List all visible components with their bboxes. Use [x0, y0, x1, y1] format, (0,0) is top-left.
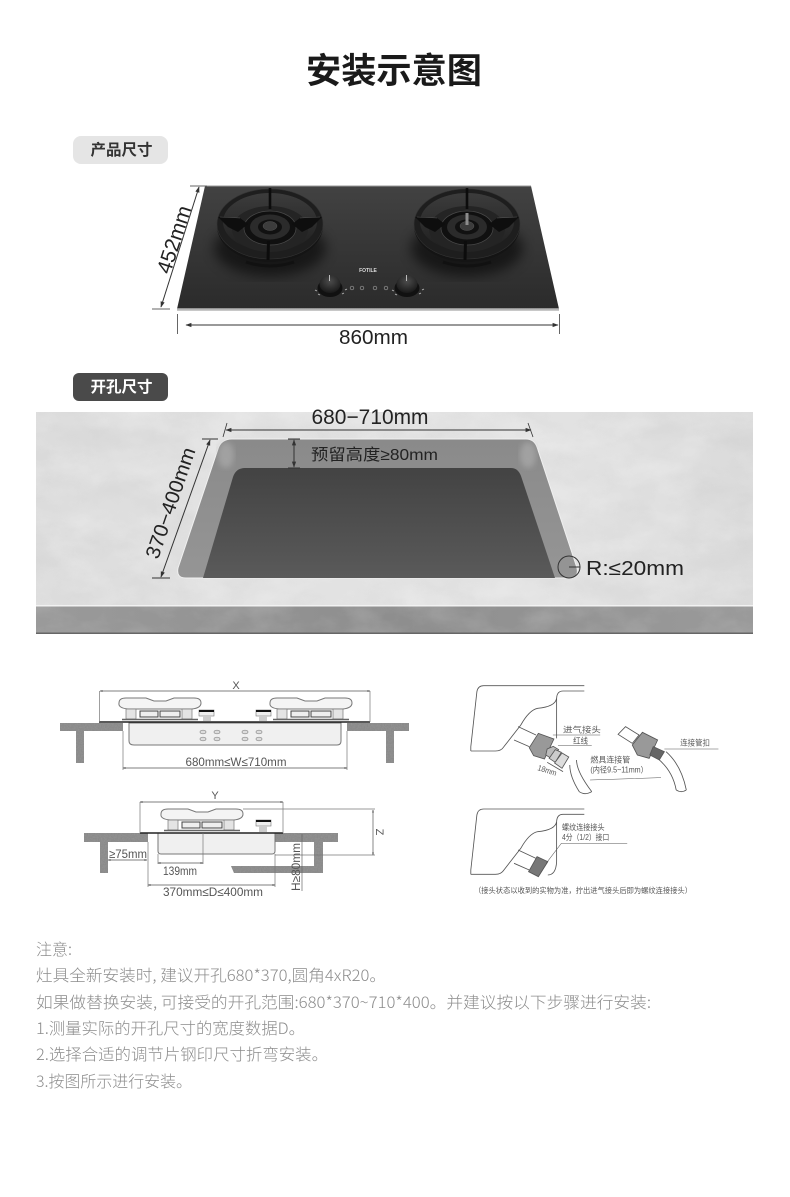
stone countertop surface [36, 412, 753, 606]
notes: 2.选择合适的调节片钢印尺寸折弯安装。 [36, 1041, 328, 1065]
right burner side view [270, 698, 352, 720]
knobs side view [199, 710, 271, 721]
connector footnote: （接头状态以收到的实物为准，拧出进气接头后即为螺纹连接接头） [474, 885, 692, 895]
labels: 进气接头 [563, 724, 601, 734]
labels: 18mm [536, 763, 558, 778]
cooktop illustration with dimensions [152, 186, 560, 349]
width dimension: 860mm [339, 327, 408, 349]
gas connector diagram: hose connection [471, 686, 718, 794]
heading pill: cutout size [73, 373, 168, 401]
side section diagram [84, 790, 385, 899]
opening depth dimension [142, 439, 218, 578]
opening width dimension [223, 406, 533, 437]
front section diagram [60, 680, 409, 770]
left counter [84, 833, 148, 873]
right counter [231, 833, 338, 873]
labels: (内径9.5~11mm） [590, 764, 648, 774]
control dots [350, 286, 388, 290]
countertop front edge [36, 605, 753, 634]
burner side view [161, 809, 243, 830]
cooktop body [158, 833, 275, 854]
labels: 连接管扣 [680, 738, 710, 748]
radius callout: R:≤20mm [586, 558, 684, 580]
labels [536, 724, 710, 778]
second connector [618, 727, 639, 743]
opening depth dimension: 370−400mm [142, 445, 200, 562]
radius callout [558, 556, 684, 580]
cutout panel [36, 406, 753, 634]
left counter [60, 723, 123, 763]
gas connector diagram: threaded joint [471, 809, 627, 877]
stove outline [471, 686, 584, 751]
notes: 注意: [36, 936, 72, 960]
left burner [214, 188, 326, 276]
W dimension: 680mm≤W≤710mm [186, 755, 286, 769]
X dimension [100, 680, 370, 722]
H dimension: H≥80mm [289, 843, 303, 891]
notes: 3.按图所示进行安装。 [36, 1068, 192, 1092]
Z dimension: Z [373, 829, 385, 836]
D dimension [148, 842, 275, 899]
18mm bracket [547, 762, 563, 772]
notes: 1.测量实际的开孔尺寸的宽度数据D。 [36, 1015, 305, 1039]
75mm clearance: ≥75mm [109, 847, 147, 861]
inlet connector [529, 733, 569, 768]
Y dimension [140, 790, 283, 833]
cooktop glass panel [177, 186, 559, 310]
cutout opening [178, 439, 577, 578]
139mm dimension [158, 833, 203, 878]
burner igniter [466, 213, 468, 225]
right burner [411, 188, 523, 276]
leader lines [553, 735, 661, 780]
glass line [99, 721, 370, 723]
notes: 灶具全新安装时, 建议开孔680*370,圆角4xR20。 [36, 962, 386, 986]
X dimension: X [232, 680, 240, 692]
notes: 如果做替换安装, 可接受的开孔范围:680*370~710*400。并建议按以下步骤进行安装: [36, 989, 651, 1013]
139mm dimension: 139mm [163, 864, 197, 878]
labels: 燃具连接管 [590, 754, 630, 764]
Y dimension: Y [211, 790, 219, 802]
labels [562, 822, 609, 842]
brand label: FOTILE [359, 268, 378, 274]
depth dimension: 452mm [153, 203, 196, 277]
left burner side view [119, 698, 201, 720]
Z dimension [243, 809, 385, 855]
threaded connector [529, 857, 548, 877]
heading pill: product size [73, 136, 168, 164]
W dimension [123, 731, 347, 770]
leader line [546, 843, 627, 863]
right knob [392, 275, 424, 297]
body holes [200, 730, 262, 741]
knob side view [256, 820, 271, 832]
left knob [315, 275, 347, 297]
depth dimension [152, 186, 207, 309]
heading pill: product size: 产品尺寸 [90, 138, 153, 160]
reserved height dimension [288, 439, 438, 468]
D dimension: 370mm≤D≤400mm [163, 885, 263, 899]
right counter [347, 723, 409, 763]
title: 安装示意图 [306, 43, 482, 94]
reserved height dimension: 预留高度≥80mm [311, 446, 438, 464]
cooktop body [129, 723, 341, 745]
glass line [140, 832, 283, 834]
labels: 螺纹连接接头 [562, 822, 605, 832]
heading pill: cutout size: 开孔尺寸 [90, 375, 153, 397]
opening width dimension: 680−710mm [312, 406, 428, 429]
labels: 红线 [573, 736, 588, 746]
labels: 4分（1/2）接口 [562, 832, 609, 842]
notes [36, 936, 651, 1092]
width dimension [178, 314, 560, 349]
hose [570, 760, 592, 794]
stove outline [471, 809, 584, 875]
